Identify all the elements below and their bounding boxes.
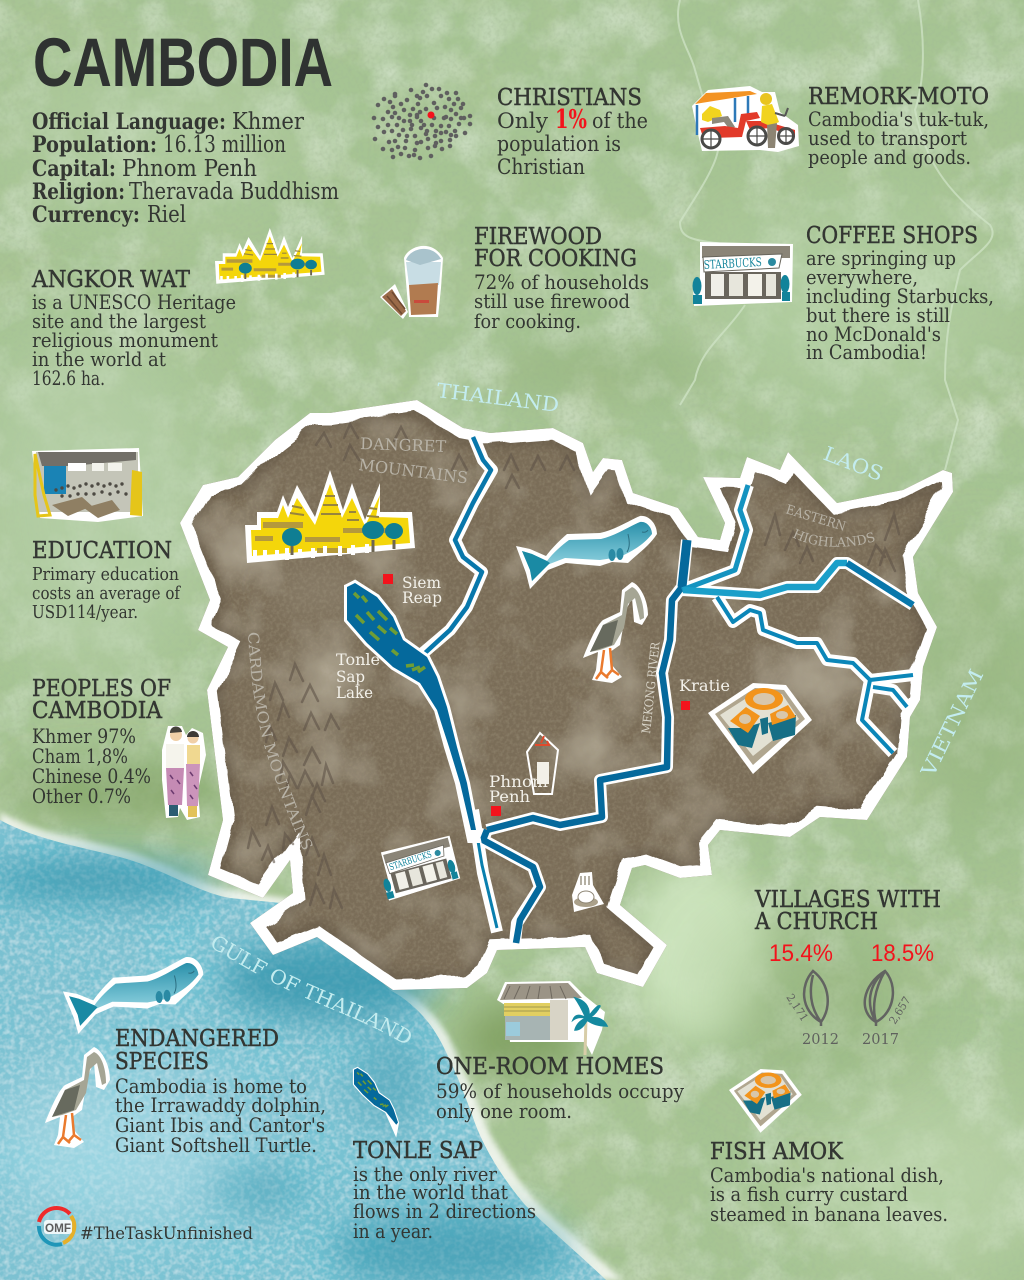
map labels: DANGRET bbox=[360, 434, 447, 456]
country labels: GULF OF THAILAND bbox=[212, 936, 411, 1043]
text block: remork-moto: used to transport bbox=[808, 126, 967, 150]
text block: endangered species: Giant Softshell Turtle. bbox=[115, 1133, 317, 1157]
map icon: Irrawaddy dolphin bbox=[516, 516, 657, 589]
text block: coffee shops: no McDonald's bbox=[806, 322, 941, 346]
text block: one-room homes: ONE-ROOM HOMES bbox=[436, 1054, 664, 1080]
text block: education: Primary education bbox=[32, 564, 179, 585]
text block: one-room homes bbox=[436, 1054, 685, 1123]
map labels: Siem bbox=[402, 573, 441, 592]
icon: giant ibis bbox=[45, 1047, 110, 1148]
text block: peoples of Cambodia bbox=[32, 676, 171, 808]
text block: Tonle Sap: TONLE SAP bbox=[353, 1138, 483, 1164]
key facts bbox=[32, 109, 339, 228]
text block: Angkor Wat bbox=[31, 267, 236, 390]
text block: endangered species: Cambodia is home to bbox=[115, 1074, 307, 1098]
text block: Christians: 1% bbox=[555, 105, 587, 135]
map labels: Tonle bbox=[336, 650, 380, 669]
key facts: Population: bbox=[32, 132, 157, 158]
text block: education bbox=[32, 538, 181, 623]
text block: endangered species: ENDANGERED bbox=[115, 1026, 279, 1052]
text block: firewood for cooking bbox=[474, 224, 649, 333]
key facts: Capital: bbox=[32, 156, 116, 182]
stat: 2017: 2017 bbox=[862, 1030, 899, 1048]
key facts: Khmer bbox=[232, 109, 304, 135]
text block: endangered species bbox=[115, 1026, 326, 1157]
text block: Christians: of the bbox=[592, 109, 648, 133]
red dot bbox=[428, 112, 434, 118]
rivers bbox=[423, 435, 913, 943]
map icon: giant ibis bbox=[583, 582, 648, 683]
faint land borders bbox=[678, 0, 993, 470]
text block: villages with a church bbox=[754, 887, 941, 1048]
text block: Tonle Sap: flows in 2 directions bbox=[353, 1199, 536, 1223]
icon: dot cluster with one red Christian dot bbox=[374, 85, 470, 158]
text block: Tonle Sap: in the world that bbox=[353, 1180, 508, 1204]
title: CAMBODIA bbox=[33, 24, 333, 101]
roof bbox=[695, 91, 757, 104]
text block: endangered species: Giant Ibis and Cantor's bbox=[115, 1113, 325, 1137]
text block: remork-moto: people and goods. bbox=[808, 145, 971, 169]
icon: one-room home with palm bbox=[497, 981, 607, 1055]
text block: coffee shops: are springing up bbox=[806, 246, 956, 270]
stat: 2017 bbox=[862, 940, 934, 1048]
text block: remork-moto bbox=[808, 84, 989, 169]
text block: education: EDUCATION bbox=[32, 538, 172, 564]
text block: Angkor Wat: in the world at bbox=[32, 347, 166, 371]
map icon: Starbucks shop bbox=[375, 834, 462, 901]
icon: firewood and cup bbox=[380, 246, 443, 319]
text block: Tonle Sap: in a year. bbox=[353, 1219, 433, 1243]
key facts: Phnom Penh bbox=[122, 156, 257, 182]
icon: Irrawaddy dolphin bbox=[62, 956, 205, 1034]
text block: Tonle Sap: is the only river bbox=[353, 1162, 497, 1186]
country labels bbox=[212, 378, 988, 1090]
text block: firewood for cooking: FOR COOKING bbox=[474, 246, 637, 272]
map labels: MEKONG RIVER bbox=[639, 641, 663, 734]
icon: Starbucks coffee shop: STARBUCKS bbox=[703, 255, 762, 272]
text block: villages with a church: A CHURCH bbox=[754, 909, 878, 935]
text block: peoples of Cambodia: PEOPLES OF bbox=[32, 676, 171, 702]
map labels: Lake bbox=[336, 683, 373, 702]
stat: 2012 bbox=[769, 940, 839, 1048]
text block: fish amok: is a fish curry custard bbox=[710, 1182, 908, 1206]
map icon: coffee cup bbox=[572, 872, 604, 912]
Tonle Sap lake bbox=[347, 583, 478, 840]
text block: fish amok: FISH AMOK bbox=[710, 1139, 844, 1165]
stat: 2012: 15.4% bbox=[769, 940, 833, 967]
stat: 2012: 2012 bbox=[802, 1030, 839, 1048]
map labels: CARDAMON MOUNTAINS bbox=[248, 632, 312, 850]
text block: Christians: CHRISTIANS bbox=[497, 85, 642, 111]
map icon: fish amok bbox=[708, 683, 812, 774]
text block: one-room homes: only one room. bbox=[436, 1099, 572, 1123]
country labels: LAOS bbox=[820, 441, 887, 486]
map labels: Penh bbox=[489, 787, 530, 806]
text block: Christians: Only bbox=[497, 109, 548, 133]
icon: Starbucks coffee shop bbox=[692, 242, 793, 306]
icon: remork-moto tuk-tuk bbox=[692, 86, 799, 152]
wheels bbox=[702, 130, 720, 148]
text block: Angkor Wat: 162.6 ha. bbox=[32, 366, 105, 390]
text block: Angkor Wat: religious monument bbox=[32, 328, 218, 352]
text block: firewood for cooking: still use firewood bbox=[474, 289, 630, 313]
text block: remork-moto: Cambodia's tuk-tuk, bbox=[808, 107, 989, 131]
city marker: Siem Reap bbox=[383, 574, 393, 584]
text block: peoples of Cambodia: Cham 1,8% bbox=[32, 744, 128, 768]
map labels: Kratie bbox=[679, 676, 730, 695]
text block: Christians bbox=[497, 85, 648, 179]
key facts: Currency: bbox=[32, 202, 140, 228]
text block: firewood for cooking: 72% of households bbox=[474, 270, 649, 294]
red frame bbox=[700, 112, 760, 138]
key facts: Religion: bbox=[32, 179, 125, 205]
text block: fish amok: Cambodia's national dish, bbox=[710, 1163, 944, 1187]
text block: coffee shops: in Cambodia! bbox=[806, 340, 927, 364]
stat: 2017: 18.5% bbox=[871, 940, 934, 967]
text block: Angkor Wat: is a UNESCO Heritage bbox=[32, 290, 236, 314]
icon: Tonle Sap mini map bbox=[354, 1068, 398, 1134]
country labels: VIETNAM bbox=[915, 665, 988, 781]
map labels: Reap bbox=[402, 588, 442, 607]
map labels bbox=[248, 434, 874, 850]
text block: education: costs an average of bbox=[32, 583, 181, 604]
text block: fish amok: steamed in banana leaves. bbox=[710, 1202, 948, 1226]
driver bbox=[761, 104, 779, 126]
city marker: Kratie bbox=[681, 701, 690, 710]
sea: Gulf of Thailand bbox=[0, 812, 622, 1280]
hashtag: #TheTaskUnfinished bbox=[80, 1224, 253, 1244]
firewood bbox=[380, 284, 408, 319]
stat: 2012: 2,171 bbox=[783, 992, 811, 1024]
icon: Angkor Wat bbox=[215, 228, 325, 284]
logo: OMF: OMF bbox=[45, 1221, 71, 1235]
text block: Angkor Wat: site and the largest bbox=[32, 309, 206, 333]
text block: peoples of Cambodia: Other 0.7% bbox=[32, 784, 131, 808]
country labels: THAILAND bbox=[435, 378, 560, 417]
map labels: EASTERN bbox=[784, 502, 848, 535]
icon: Khmer couple in traditional dress bbox=[162, 726, 206, 820]
mountain ranges bbox=[248, 424, 899, 908]
map labels: MOUNTAINS bbox=[358, 455, 469, 487]
map icon: Angkor Wat bbox=[245, 470, 415, 563]
text block: remork-moto: REMORK-MOTO bbox=[808, 84, 989, 110]
text block: coffee shops bbox=[806, 223, 994, 364]
logo: OMF bbox=[39, 1208, 74, 1245]
map icon: cup outline bbox=[527, 733, 558, 794]
text block: coffee shops: including Starbucks, bbox=[806, 284, 994, 308]
text block: peoples of Cambodia: Khmer 97% bbox=[32, 724, 136, 748]
map labels: HIGHLANDS bbox=[792, 528, 874, 547]
text block: peoples of Cambodia: Chinese 0.4% bbox=[32, 764, 151, 788]
text block: firewood for cooking: FIREWOOD bbox=[474, 224, 602, 250]
text block: Christians: Christian bbox=[497, 155, 585, 179]
passenger bbox=[702, 106, 722, 122]
map of Cambodia bbox=[180, 400, 953, 990]
text block: Tonle Sap bbox=[353, 1138, 536, 1243]
text block: coffee shops: but there is still bbox=[806, 303, 950, 327]
key facts: Theravada Buddhism bbox=[129, 179, 339, 205]
text block: one-room homes: 59% of households occupy bbox=[436, 1079, 685, 1103]
text block: Angkor Wat: ANGKOR WAT bbox=[31, 267, 191, 293]
icon: classroom bbox=[32, 448, 143, 522]
map labels: Sap bbox=[336, 667, 365, 686]
icon: fish amok bbox=[729, 1069, 802, 1133]
text block: endangered species: SPECIES bbox=[115, 1049, 209, 1075]
text block: peoples of Cambodia: CAMBODIA bbox=[32, 698, 162, 724]
stat: 2017: 2,657 bbox=[887, 994, 913, 1027]
cup bbox=[404, 246, 443, 317]
text block: fish amok bbox=[710, 1139, 948, 1226]
map icon: Starbucks shop: STARBUCKS bbox=[388, 850, 433, 873]
key facts: 16.13 million bbox=[163, 132, 286, 158]
text block: coffee shops: everywhere, bbox=[806, 265, 918, 289]
city marker: Phnom Penh bbox=[491, 806, 501, 816]
text block: education: USD114/year. bbox=[32, 602, 138, 623]
text block: endangered species: the Irrawaddy dolphin, bbox=[115, 1093, 326, 1117]
text block: villages with a church: VILLAGES WITH bbox=[754, 887, 941, 913]
map labels: Phnom bbox=[489, 772, 548, 791]
text block: firewood for cooking: for cooking. bbox=[474, 309, 581, 333]
key facts: Official Language: bbox=[32, 109, 226, 135]
text block: coffee shops: COFFEE SHOPS bbox=[806, 223, 978, 249]
key facts: Riel bbox=[147, 202, 186, 228]
text block: Christians: population is bbox=[497, 132, 621, 156]
